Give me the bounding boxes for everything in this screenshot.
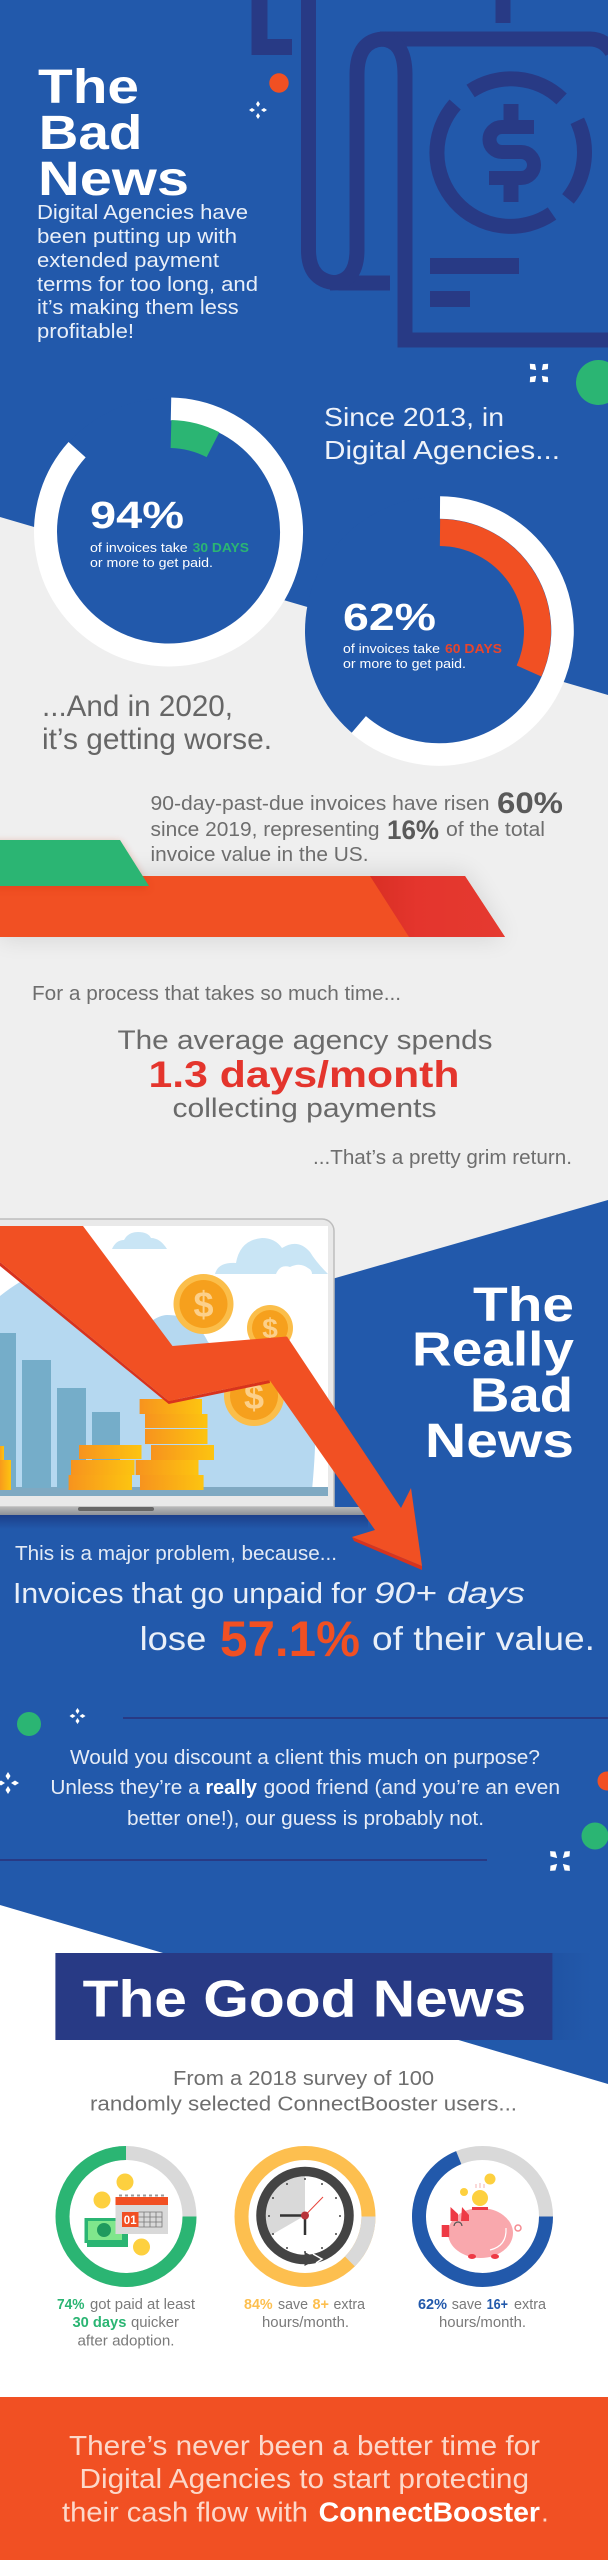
callout: 57.1 percent lost value: Invoices that go unpaid for: [13, 1578, 367, 1610]
heading: The Bad News: Bad: [39, 107, 142, 160]
icon: x sparkle: [540, 1841, 580, 1881]
icon: x sparkle: [521, 355, 557, 391]
text block: would you discount: really: [206, 1777, 258, 1799]
callout: 1.3 days per month: collecting payments: [172, 1093, 436, 1123]
caption: 84 percent: extra: [334, 2296, 366, 2313]
text block: intro: been putting up with: [37, 226, 237, 248]
heading: The Good News banner: The Good News: [83, 1971, 526, 2029]
caption: 74 percent: 74%: [57, 2296, 84, 2313]
illustration: laptop with falling chart: $: [262, 1313, 278, 1344]
text block: survey intro: [90, 2068, 517, 2116]
heading: The Good News banner: [55, 1953, 592, 2040]
caption: 74 percent: quicker: [131, 2314, 179, 2331]
caption: 62 percent: save: [452, 2296, 482, 2313]
text block: 60 percent statistic: of the total: [446, 819, 545, 841]
text block: would you discount: Would you discount a client this much on purpose?: [70, 1747, 540, 1769]
text block: intro: it’s making them less: [37, 297, 239, 319]
text block: major problem: This is a major problem, because...: [15, 1543, 337, 1565]
chart: 94 percent ring: of invoices take: [90, 541, 188, 555]
icon: green dot: [17, 1712, 41, 1736]
text block: would you discount: good friend (and you’re an even: [264, 1777, 560, 1799]
chart: 62 percent ring: 60 DAYS: [445, 642, 502, 656]
icon: green dot: [582, 1822, 608, 1850]
text block: for a process: For a process that takes so much time...: [32, 983, 401, 1005]
heading: The Really Bad News: Bad: [470, 1370, 573, 1423]
chart: 94 percent ring: [34, 398, 302, 666]
chart: 94 percent ring: 94%: [90, 495, 184, 537]
illustration: laptop with falling chart: [0, 1219, 422, 1570]
chart: 62 percent donut with piggy bank: [419, 2153, 546, 2280]
text block: 60 percent statistic: 16%: [387, 815, 439, 845]
panel: orange footer: .: [541, 2497, 549, 2528]
panel: orange footer: ConnectBooster: [319, 2497, 540, 2528]
caption: 62 percent: extra: [514, 2296, 547, 2313]
icon: sparkle: [249, 101, 267, 119]
callout: 1.3 days per month: [118, 1025, 492, 1123]
caption: 84 percent: 84%: [244, 2296, 273, 2313]
caption: 84 percent: 8+: [312, 2296, 329, 2313]
chart: 74 percent donut with calendar and cash: 01: [124, 2215, 137, 2227]
heading: The Bad News: News: [38, 153, 189, 206]
text block: 60 percent statistic: invoice value in the US.: [150, 844, 368, 866]
heading: The Bad News: [38, 61, 189, 206]
caption: 74 percent: [57, 2296, 196, 2350]
callout: 57.1 percent lost value: of their value.: [372, 1620, 595, 1657]
panel: top blue section: [0, 0, 608, 695]
heading: Since 2013: Since 2013, in: [324, 402, 504, 432]
callout: 1.3 days per month: 1.3 days/month: [148, 1054, 460, 1095]
text block: would you discount: better one!), our guess is probably not.: [127, 1808, 484, 1830]
icon: sparkle: [70, 1708, 86, 1724]
callout: 1.3 days per month: The average agency spends: [118, 1025, 492, 1055]
text block: intro: extended payment: [37, 250, 219, 272]
chart: 62 percent ring: [305, 497, 573, 765]
callout: 57.1 percent lost value: [13, 1577, 595, 1667]
text block: survey intro: randomly selected ConnectBooster users...: [90, 2094, 517, 2116]
illustration: laptop with falling chart: $: [244, 1376, 264, 1417]
panel: orange footer: There’s never been a better time for: [69, 2430, 540, 2461]
text block: grim return: ...That’s a pretty grim return.: [313, 1147, 572, 1169]
caption: 84 percent: save: [278, 2296, 308, 2313]
callout: 57.1 percent lost value: lose: [140, 1620, 206, 1657]
icon: orange dot: [598, 1772, 608, 1790]
callout: 57.1 percent lost value: 90+ days: [374, 1577, 525, 1610]
text block: 60 percent statistic: 90-day-past-due invoices have risen: [150, 793, 490, 815]
panel: orange footer: Digital Agencies to start protecting: [80, 2463, 529, 2494]
caption: 84 percent: hours/month.: [262, 2314, 349, 2331]
chart: 62 percent ring: 62%: [343, 597, 436, 639]
text block: intro: Digital Agencies have: [37, 202, 248, 224]
icon: green dot: [576, 360, 608, 405]
heading: The Really Bad News: The: [473, 1279, 574, 1332]
text block: 60 percent statistic: since 2019, representing: [150, 819, 380, 841]
chart: 74 percent donut with calendar and cash: [62, 2153, 190, 2280]
chart: 84 percent donut with clock: [242, 2153, 368, 2280]
text block: intro: terms for too long, and: [37, 274, 258, 296]
chart: stacked slanted bars: [0, 840, 505, 939]
panel: orange footer: [0, 2397, 608, 2560]
panel: white good news background: [0, 1900, 608, 2400]
caption: 74 percent: got paid at least: [90, 2296, 196, 2313]
heading: And in 2020: ...And in 2020,: [42, 690, 233, 723]
text block: 60 percent statistic: [150, 787, 563, 866]
text block: 60 percent statistic: 60%: [497, 787, 563, 820]
chart: 62 percent ring: of invoices take: [343, 642, 440, 656]
icon: sparkle: [0, 1772, 19, 1794]
heading: The Bad News: The: [38, 61, 139, 114]
icon: orange dot: [269, 73, 289, 93]
heading: Since 2013: [324, 402, 560, 465]
panel: lower blue section: [0, 1200, 608, 2084]
heading: And in 2020: [42, 690, 272, 756]
chart: 62 percent ring: or more to get paid.: [343, 657, 466, 671]
text block: would you discount: Unless they’re a: [50, 1777, 201, 1799]
text block: intro: profitable!: [37, 321, 134, 343]
caption: 74 percent: 30 days: [72, 2314, 126, 2331]
heading: The Really Bad News: [412, 1279, 574, 1468]
chart: 94 percent ring: or more to get paid.: [90, 556, 213, 570]
caption: 74 percent: after adoption.: [78, 2333, 174, 2350]
chart: 94 percent ring: 30 DAYS: [193, 541, 249, 555]
heading: And in 2020: it’s getting worse.: [42, 723, 272, 756]
caption: 62 percent: [418, 2296, 547, 2331]
heading: The Really Bad News: News: [425, 1415, 574, 1468]
caption: 84 percent: [244, 2296, 366, 2331]
icon: invoice document with dollar coin: [260, 0, 608, 340]
text block: survey intro: From a 2018 survey of 100: [173, 2068, 434, 2090]
caption: 62 percent: 16+: [487, 2296, 508, 2313]
text block: would you discount: [50, 1747, 560, 1830]
panel: orange footer: their cash flow with: [62, 2497, 308, 2528]
caption: 62 percent: hours/month.: [439, 2314, 526, 2331]
heading: The Really Bad News: Really: [412, 1324, 574, 1377]
callout: 57.1 percent lost value: 57.1%: [220, 1611, 360, 1667]
caption: 62 percent: 62%: [418, 2296, 447, 2313]
heading: Since 2013: Digital Agencies...: [324, 435, 560, 465]
text block: intro: [37, 202, 258, 343]
illustration: laptop with falling chart: $: [193, 1284, 214, 1325]
